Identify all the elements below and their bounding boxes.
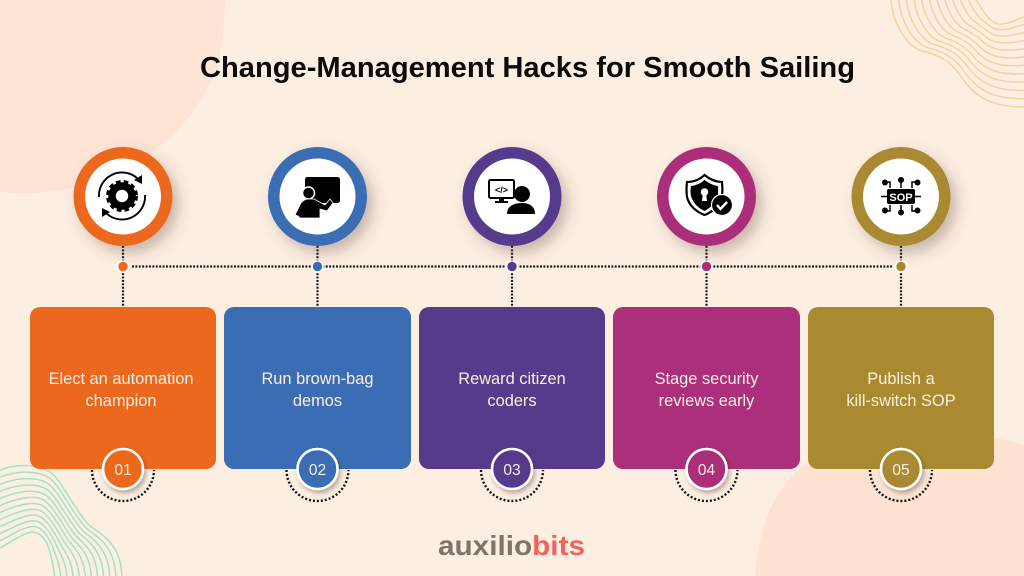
step 4 bbox=[613, 147, 800, 501]
icon: gear with cycle arrows bbox=[99, 172, 145, 220]
wavy lines: bottom left bbox=[0, 466, 122, 576]
step 1 number badge: 01 bbox=[114, 462, 132, 479]
step 5 text: Publish a bbox=[867, 370, 936, 388]
step 1 number badge bbox=[92, 449, 154, 501]
step 1 card bbox=[30, 307, 216, 469]
logo: auxiliobits bbox=[438, 530, 585, 561]
step 2 number badge bbox=[286, 449, 348, 501]
title: Change-Management Hacks for Smooth Sailing bbox=[200, 52, 855, 84]
step 1 timeline dot bbox=[118, 261, 128, 272]
step 2 text: demos bbox=[293, 392, 342, 410]
icon: SOP chip: SOP bbox=[889, 192, 913, 204]
step 3 text: coders bbox=[487, 392, 537, 410]
step 3 number badge bbox=[481, 449, 543, 501]
step 1 text: Elect an automation bbox=[49, 370, 193, 388]
step 3 text: Reward citizen bbox=[458, 370, 566, 388]
step 3 bbox=[419, 147, 605, 501]
step 3 timeline dot bbox=[506, 261, 518, 272]
step 4 timeline dot bbox=[701, 261, 712, 272]
icon: coder at monitor: </> bbox=[495, 185, 508, 195]
step 3 card bbox=[419, 307, 605, 469]
step 5 number badge bbox=[870, 449, 932, 501]
timeline connector bbox=[132, 265, 892, 268]
step 2 bbox=[224, 147, 411, 501]
step 3 medallion bbox=[462, 147, 562, 246]
step 4 text: reviews early bbox=[659, 392, 755, 410]
step 1 medallion bbox=[74, 147, 172, 246]
icon: shield with check bbox=[686, 175, 732, 216]
step 5 medallion bbox=[852, 147, 950, 246]
background blob: bottom right bbox=[755, 432, 1024, 576]
step 1 bbox=[30, 147, 216, 501]
step 4 medallion bbox=[657, 147, 756, 246]
background blob: top left bbox=[0, 0, 225, 193]
step 5 timeline dot bbox=[896, 261, 906, 272]
step 3 number badge: 03 bbox=[503, 462, 521, 479]
step 1 text: champion bbox=[85, 392, 157, 410]
step 4 text: Stage security bbox=[655, 370, 759, 388]
step 4 number badge bbox=[676, 449, 738, 501]
step 5 bbox=[808, 147, 994, 501]
step 5 number badge: 05 bbox=[892, 462, 910, 479]
step 2 number badge: 02 bbox=[309, 462, 326, 479]
icon: presenter at board bbox=[295, 177, 340, 218]
step 2 card bbox=[224, 307, 411, 469]
step 2 timeline dot bbox=[312, 261, 323, 272]
step 2 medallion bbox=[268, 147, 367, 246]
step 5 card bbox=[808, 307, 994, 469]
step 4 number badge: 04 bbox=[698, 462, 715, 479]
wavy lines: top right bbox=[891, 0, 1024, 107]
step 4 card bbox=[613, 307, 800, 469]
step 5 text: kill-switch SOP bbox=[846, 392, 956, 410]
step 2 text: Run brown-bag bbox=[261, 370, 374, 388]
